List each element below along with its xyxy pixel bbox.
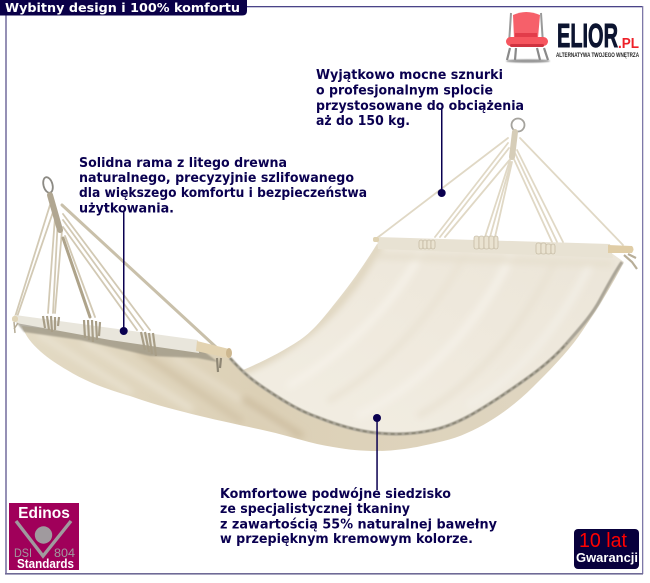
left ring and knot bbox=[42, 176, 60, 230]
callout text: fabric bbox=[220, 487, 497, 547]
callout: frame bbox=[79, 156, 367, 335]
pointer: ropes bbox=[438, 108, 446, 197]
pointer: fabric bbox=[373, 414, 381, 490]
brand logo: Elior.pl bbox=[506, 12, 639, 63]
badge: Edinos DSI 804 Standards: Standards bbox=[17, 557, 74, 571]
badge: 10 lat Gwarancji bbox=[574, 529, 639, 569]
callout text: frame: użytkowania. bbox=[79, 202, 174, 216]
callout text: ropes: przystosowane do obciążenia bbox=[316, 99, 524, 114]
callout text: ropes: Wyjątkowo mocne sznurki bbox=[316, 68, 503, 83]
callout text: frame bbox=[79, 156, 367, 216]
right ring and knot bbox=[512, 118, 524, 157]
logo domain: .PL bbox=[618, 35, 639, 52]
badge: Edinos DSI 804 Standards: Edinos bbox=[18, 505, 70, 522]
callout text: fabric: w przepięknym kremowym kolorze. bbox=[220, 532, 473, 547]
pointer: frame bbox=[120, 212, 128, 335]
hammock top fabric bbox=[243, 244, 624, 434]
callout text: ropes bbox=[316, 68, 524, 129]
callout text: fabric: ze specjalistycznej tkaniny bbox=[220, 502, 410, 517]
left rope knots bbox=[43, 316, 221, 372]
right wooden bar bbox=[373, 237, 637, 269]
left wooden bar bbox=[12, 315, 232, 362]
callout text: ropes: o profesjonalnym splocie bbox=[316, 84, 493, 98]
hammock illustration bbox=[12, 118, 637, 451]
badge: 10 lat Gwarancji: 10 lat bbox=[579, 530, 627, 552]
hammock underside fabric bbox=[22, 262, 624, 451]
left bar ropes bbox=[15, 205, 217, 348]
callout text: frame: dla większego komfortu i bezpieczeństwa bbox=[79, 186, 367, 201]
badge icon: V and circle bbox=[16, 521, 71, 556]
hammock grey seam bbox=[230, 262, 622, 434]
icon: red chair bbox=[506, 12, 550, 63]
callout: ropes bbox=[316, 68, 524, 197]
callout text: fabric: Komfortowe podwójne siedzisko bbox=[220, 487, 451, 502]
callout text: frame: naturalnego, precyzyjnie szlifowanego bbox=[79, 171, 354, 186]
badge: Edinos DSI 804 Standards bbox=[9, 503, 79, 571]
badge: Edinos DSI 804 Standards: DSI bbox=[14, 546, 32, 560]
badge: 10 lat Gwarancji: Gwarancji bbox=[576, 551, 638, 565]
right bar ropes bbox=[377, 138, 623, 245]
callout text: fabric: z zawartością 55% naturalnej bawełny bbox=[220, 518, 497, 532]
callout: fabric bbox=[220, 414, 497, 547]
right rope knots bbox=[419, 236, 555, 254]
callout text: ropes: aż do 150 kg. bbox=[316, 114, 410, 129]
callout text: frame: Solidna rama z litego drewna bbox=[79, 156, 287, 171]
badge: Edinos DSI 804 Standards: 804 bbox=[54, 546, 75, 560]
title banner: Wybitny design i 100% komfortu bbox=[5, 0, 240, 15]
